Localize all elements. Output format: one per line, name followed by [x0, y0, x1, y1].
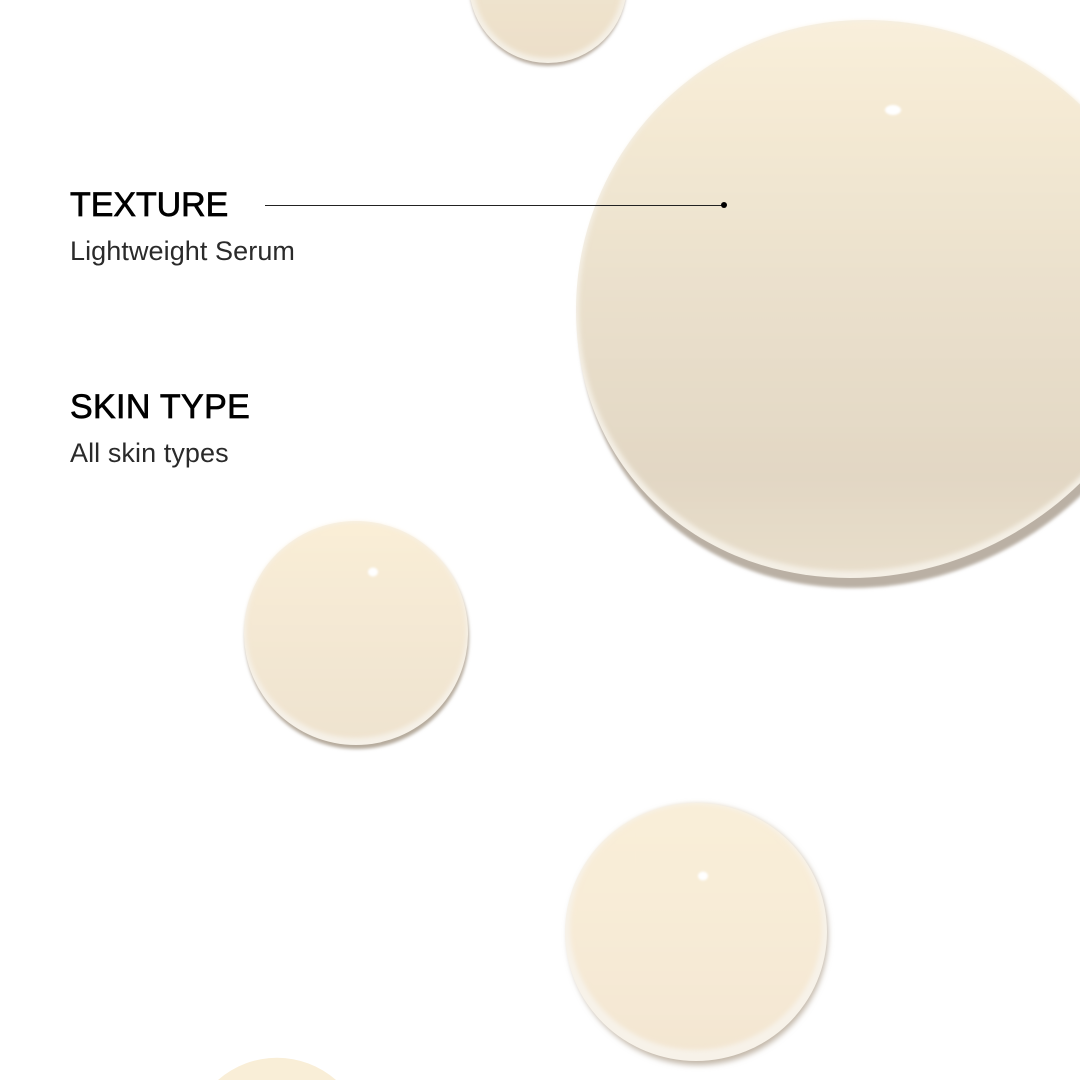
highlight: [885, 105, 901, 115]
droplet: bottom: [218, 1058, 336, 1080]
heading: skin type: SKIN TYPE: [70, 388, 250, 426]
droplet: large: [576, 20, 1080, 588]
highlight: [698, 872, 708, 880]
highlight: [368, 568, 378, 576]
text: lightweight serum: Lightweight Serum: [70, 236, 295, 266]
droplet: middle: [244, 521, 469, 749]
text: all skin types: All skin types: [70, 438, 229, 468]
droplet: lower: [565, 803, 828, 1065]
droplet: top: [469, 0, 627, 66]
heading: texture: TEXTURE: [70, 186, 228, 224]
